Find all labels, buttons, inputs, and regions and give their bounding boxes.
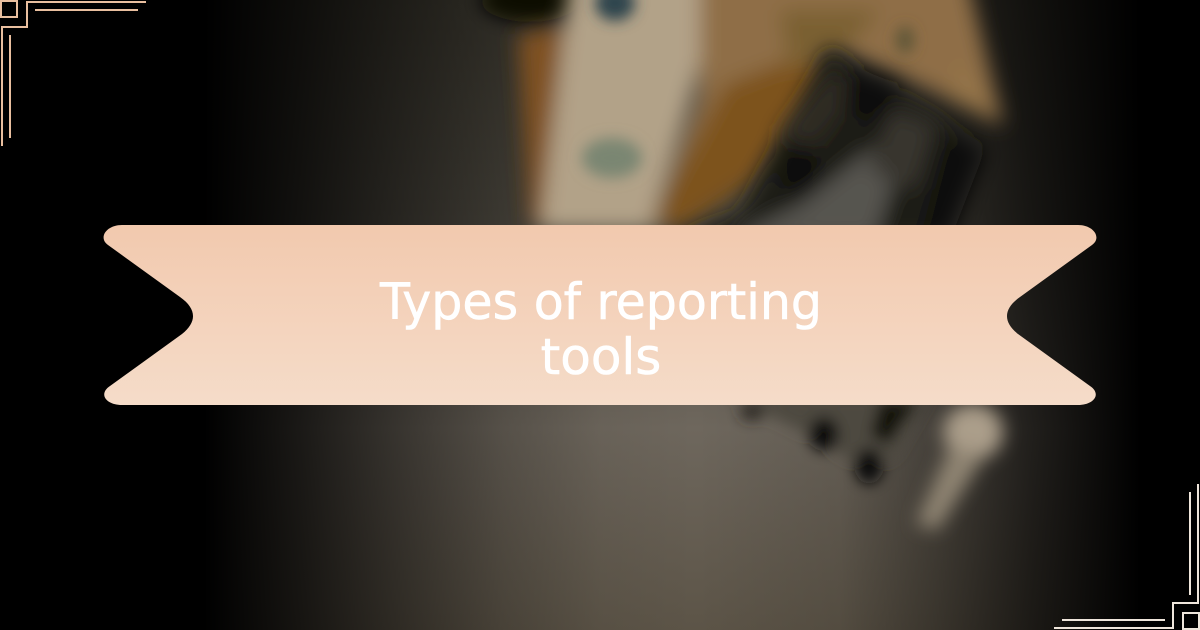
blurred key xyxy=(916,404,1003,530)
corner ornament: bottom right xyxy=(1054,484,1199,629)
corner ornament: top left xyxy=(1,1,146,146)
blurred blue and green spots xyxy=(582,0,914,178)
dark corner above paper stack xyxy=(480,0,580,22)
title text: Types of reporting xyxy=(379,273,822,331)
blurred calculator lower area xyxy=(730,395,930,484)
title text: tools xyxy=(541,328,661,386)
blurred paper stack xyxy=(518,0,1003,230)
blurred calculator xyxy=(665,48,985,240)
title banner xyxy=(104,225,1096,405)
